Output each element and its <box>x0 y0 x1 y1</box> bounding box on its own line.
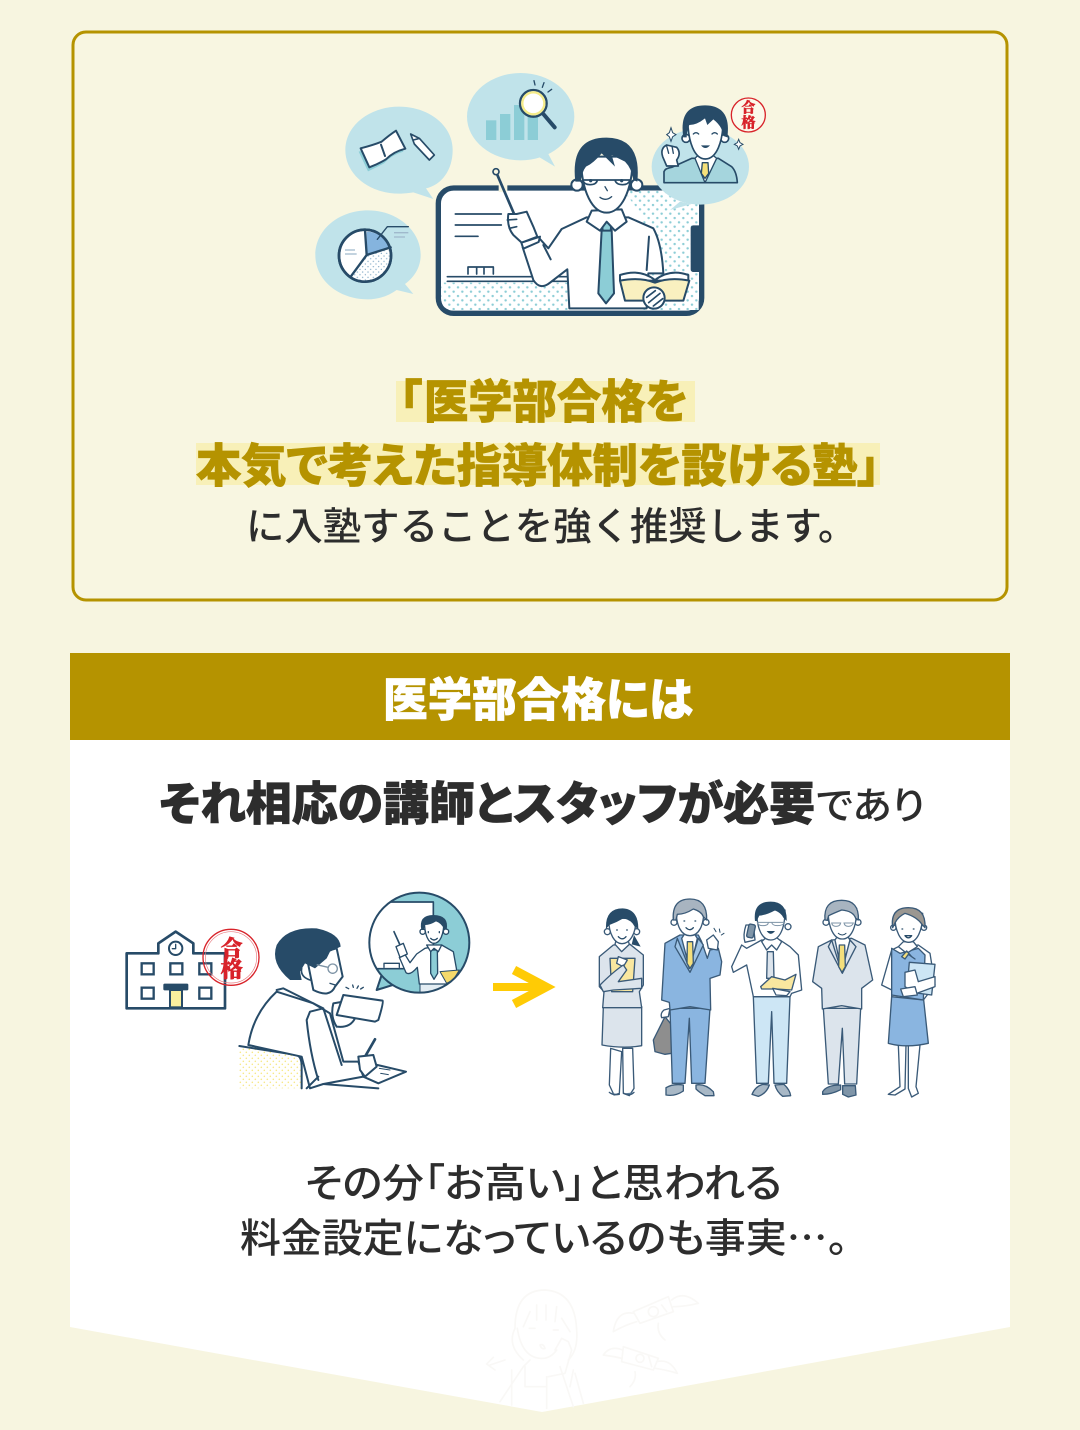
panel: recommendation <box>73 32 1007 600</box>
stamp: pass: 合 <box>741 97 755 117</box>
person: older man in grey suit <box>813 900 873 1097</box>
speech bubble: online lesson <box>367 890 473 997</box>
heading suffix: であり <box>816 786 925 828</box>
arrow <box>493 970 546 1004</box>
teacher <box>493 138 689 309</box>
panel: staff and cost <box>70 653 1010 1412</box>
heading: recommendation line 2: 本気で考えた指導体制を設ける塾」 <box>196 440 880 492</box>
illustration: instructors and staff <box>599 899 935 1097</box>
speech bubble: pie chart <box>315 210 421 299</box>
highlight: first line <box>396 381 695 422</box>
text: cost line 2: 料金設定になっているのも事実 …。 <box>240 1206 848 1264</box>
heading: recommendation line 1: 「 <box>399 376 422 428</box>
faint illustration: woman and flying money <box>487 1290 698 1408</box>
person: man in blue suit <box>653 899 724 1096</box>
icon: school <box>127 932 225 1008</box>
text: cost line 1: その分「お高い」と思われる <box>305 1162 782 1206</box>
illustration: student learning online <box>127 890 473 1088</box>
stamp: pass <box>731 97 765 132</box>
speech bubble: happy graduate <box>652 105 749 210</box>
person: woman in blue uniform <box>882 908 935 1097</box>
stamp: pass: 合 <box>221 932 243 963</box>
speech bubble: bar chart and magnifier <box>467 73 574 167</box>
highlight: second line <box>196 443 880 485</box>
student <box>239 928 406 1088</box>
smartphone frame <box>438 183 704 313</box>
text: recommendation line 3: に入塾することを強く推奨します。 <box>246 506 856 549</box>
person: man with phone <box>732 902 802 1096</box>
stamp: pass <box>203 929 259 985</box>
heading: instructors and staff: それ相応の講師とスタッフが必要 <box>159 778 815 830</box>
stamp: pass: 格 <box>221 953 243 984</box>
banner heading: 医学部合格には <box>383 674 693 726</box>
banner <box>70 653 1010 740</box>
person: woman in grey suit <box>599 908 643 1096</box>
speech bubble: book and pencil <box>345 107 453 199</box>
stamp: pass: 格 <box>741 112 755 132</box>
illustration: online teacher with speech bubbles <box>315 73 765 313</box>
heading: recommendation line 1: 医学部合格を <box>424 376 688 428</box>
